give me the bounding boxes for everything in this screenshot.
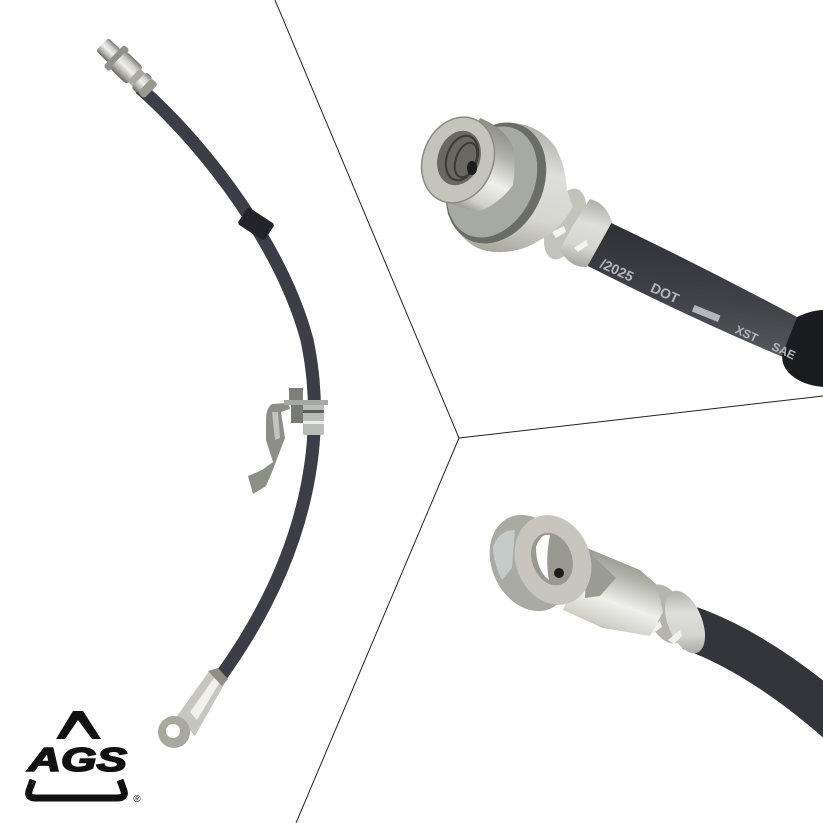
detail: banjo fitting [474,502,823,732]
hose markings: SAE [769,339,798,362]
fitting face [409,106,507,214]
banjo hole [524,527,580,591]
full brake hose [92,33,328,748]
hose markings: /2025 [598,255,636,285]
hose markings [598,255,798,362]
divider lines [275,0,823,823]
bottom eye fitting [158,668,228,748]
banjo body [563,548,663,636]
threaded bore [430,125,488,191]
banjo crimp [638,579,694,649]
hose close-up lower [690,628,823,732]
logo top chevron [56,711,101,739]
crimp bulges [535,183,595,265]
hose body [140,88,314,680]
sleeve close-up [782,310,823,387]
mounting bracket and clamp [248,388,328,494]
logo bottom bracket [29,780,124,798]
banjo rear ring [474,502,586,624]
registered mark: ® [133,794,141,805]
banjo face [501,503,605,617]
top fitting [92,33,161,102]
hose markings: XST [733,323,761,345]
detail: threaded fitting [409,106,823,387]
groove ring [427,106,565,260]
hose sleeve [237,207,275,241]
hose close-up [580,220,797,357]
logo wordmark: AGS [27,741,127,778]
neck cylinder [443,118,514,212]
hose markings: DOT [648,280,682,307]
fitting flange and body [447,123,573,252]
AGS logo [27,711,141,805]
